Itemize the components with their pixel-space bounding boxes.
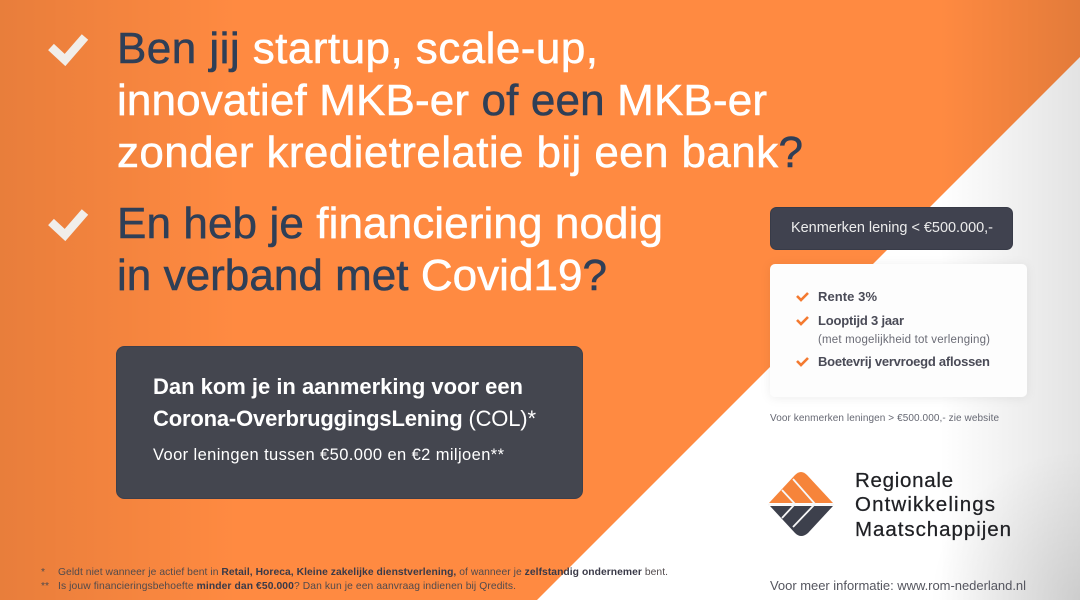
panel: COL callout bbox=[116, 346, 582, 498]
heading: second question: in verband met Covid19? bbox=[117, 251, 607, 300]
heading: second question bbox=[117, 199, 663, 300]
footnotes: * bbox=[41, 567, 45, 578]
panel: loan features header: Kenmerken lening < €500.000,- bbox=[791, 220, 993, 236]
heading: first question bbox=[117, 24, 803, 177]
icon: orange check 2 bbox=[797, 317, 808, 324]
icon: logo bbox=[768, 472, 834, 536]
feature: early repayment: Boetevrij vervroegd aflossen bbox=[818, 354, 990, 369]
icon: orange check 3 bbox=[797, 358, 808, 365]
logo wordmark: Regionale bbox=[855, 469, 953, 492]
heading: first question: zonder kredietrelatie bij een bank? bbox=[117, 128, 803, 177]
feature: term note: (met mogelijkheid tot verlenging) bbox=[818, 334, 990, 346]
heading: first question: Ben jij startup, scale-up, bbox=[117, 24, 598, 73]
background: white diagonal area bbox=[537, 57, 1080, 600]
footnotes: ** bbox=[41, 581, 49, 592]
callout text: eligibility: Voor leningen tussen €50.000 en €2 miljoen** bbox=[153, 446, 505, 464]
panel: loan features header bbox=[770, 208, 1012, 250]
panel: loan features list bbox=[770, 264, 1027, 397]
callout text: eligibility bbox=[153, 374, 536, 464]
icon: check 1 bbox=[51, 37, 85, 60]
footnotes: Is jouw financieringsbehoefte minder dan €50.000? Dan kun je een aanvraag indienen bij Qredits. bbox=[58, 581, 516, 592]
logo wordmark: Maatschappijen bbox=[855, 518, 1011, 541]
logo wordmark bbox=[855, 469, 1011, 541]
footnotes: Geldt niet wanneer je actief bent in Retail, Horeca, Kleine zakelijke dienstverlening, of wanneer je zelfstandig ondernemer bent. bbox=[58, 567, 668, 578]
note: larger loans: Voor kenmerken leningen > €500.000,- zie website bbox=[770, 413, 999, 424]
callout text: eligibility: Corona-OverbruggingsLening (COL)* bbox=[153, 406, 536, 431]
footnotes bbox=[41, 567, 668, 592]
heading: second question: En heb je financiering nodig bbox=[117, 199, 663, 248]
feature: interest: Rente 3% bbox=[818, 289, 877, 304]
heading: first question: innovatief MKB-er of een MKB-er bbox=[117, 76, 767, 125]
icon: orange check 1 bbox=[797, 293, 808, 300]
icon: check 2 bbox=[51, 212, 85, 235]
feature: term: Looptijd 3 jaar bbox=[818, 313, 904, 328]
contact line: Voor meer informatie: www.rom-nederland.nl bbox=[770, 578, 1026, 593]
callout text: eligibility: Dan kom je in aanmerking voor een bbox=[153, 374, 523, 399]
logo wordmark: Ontwikkelings bbox=[855, 493, 995, 516]
